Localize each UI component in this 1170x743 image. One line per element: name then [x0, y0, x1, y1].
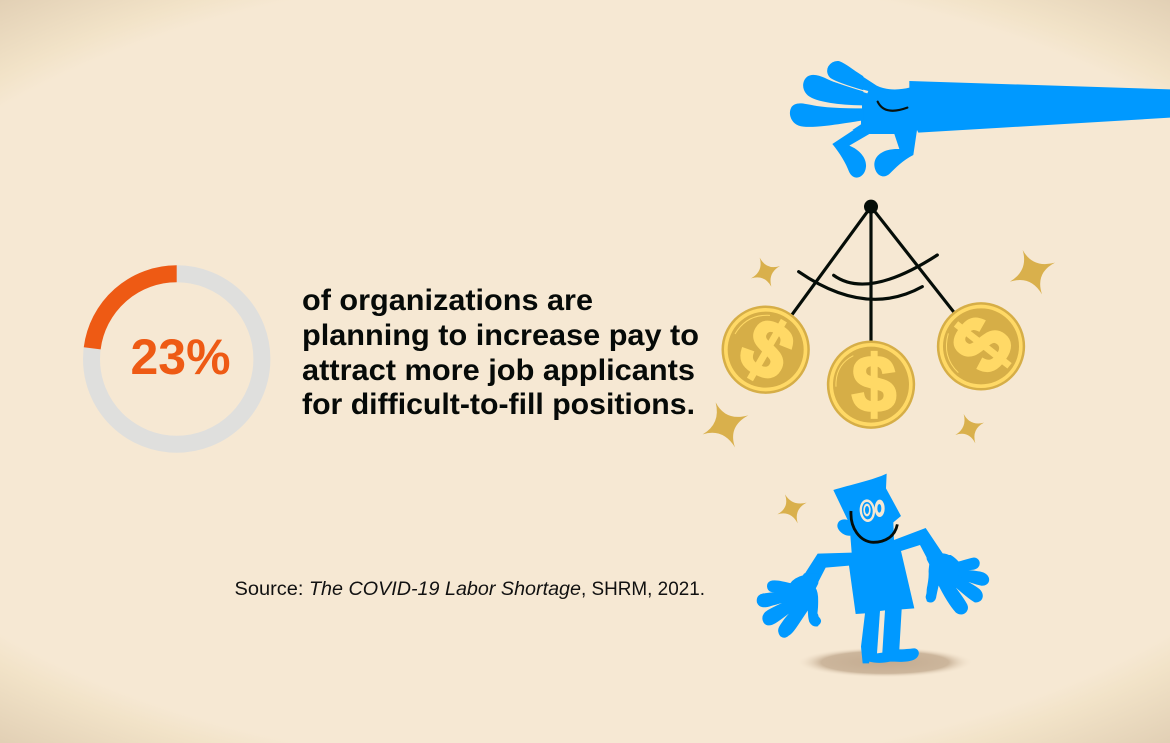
donut chart: 23% [92, 274, 262, 444]
coin: right: $ [933, 300, 1031, 389]
main statement text: of organizations are [302, 284, 593, 317]
coin: middle [827, 340, 915, 429]
main statement text: for difficult-to-fill positions. [302, 388, 695, 421]
icon: reaching blue arm and hand [791, 62, 1170, 178]
source note [234, 579, 705, 600]
donut value arc [92, 274, 177, 348]
donut value label: 23% [130, 329, 230, 385]
figure hands [756, 555, 990, 638]
donut track [92, 274, 262, 444]
pendulum pivot [864, 200, 878, 214]
main statement text: attract more job applicants [302, 354, 695, 387]
main statement text: planning to increase pay to [302, 319, 699, 352]
source note: , SHRM, 2021. [581, 579, 705, 600]
source note: The COVID-19 Labor Shortage [309, 579, 581, 600]
pendulum strings [792, 207, 954, 342]
figure body [757, 474, 988, 663]
smile [851, 511, 897, 542]
sparkles [703, 250, 1055, 447]
eyes [859, 499, 885, 523]
source note: Source: [234, 579, 304, 600]
main statement text [302, 284, 699, 421]
figure shadow [797, 647, 973, 678]
gap between legs [877, 610, 885, 653]
sparkle near head [777, 494, 807, 523]
smiling blue figure [757, 474, 988, 678]
coin: left: $ [726, 300, 809, 399]
coin: middle: $ [852, 340, 896, 429]
pendulum with coins and sparkles [703, 200, 1055, 447]
